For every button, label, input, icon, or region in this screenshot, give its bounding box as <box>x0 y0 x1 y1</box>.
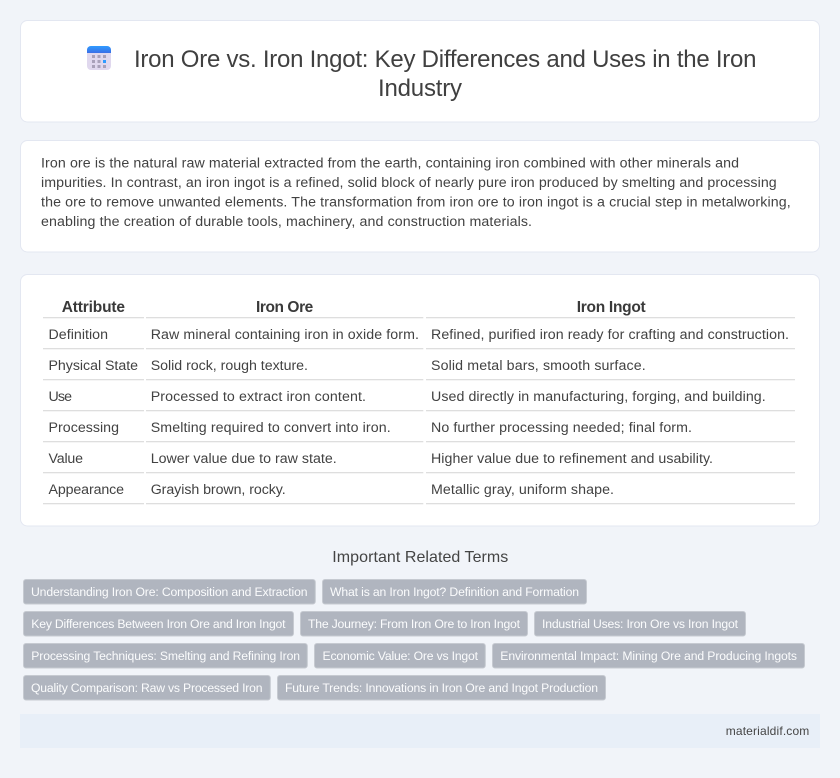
tag: Quality Comparison: Raw vs Processed Iron <box>31 681 262 695</box>
tag <box>322 580 586 604</box>
table row: value: Lower value due to raw state. <box>151 451 337 467</box>
icon: calendar <box>87 46 111 70</box>
tag: What is an Iron Ingot? Definition and Formation <box>330 585 579 599</box>
table row: definition: Definition <box>48 327 108 343</box>
tag <box>24 644 307 668</box>
text block: introduction: Iron ore is the natural raw material extracted from the earth, containing iron combined with other minerals and <box>41 156 739 172</box>
table row: processing: Smelting required to convert into iron. <box>151 420 391 436</box>
tag <box>24 676 270 700</box>
text block: introduction: the ore to remove unwanted elements. The transformation from iron ore to iron ingot is a crucial step in metalworking, <box>41 194 791 210</box>
tag: Economic Value: Ore vs Ingot <box>322 649 479 663</box>
tag list: related terms <box>24 580 804 700</box>
tag <box>300 612 528 636</box>
panel: comparison table <box>20 274 820 526</box>
text block: introduction: impurities. In contrast, an iron ingot is a refined, solid block of nearly pure iron produced by smelting and processing <box>41 175 777 191</box>
tag <box>492 644 804 668</box>
table row: physical state: Solid rock, rough texture. <box>151 358 308 374</box>
panel: header <box>20 20 820 122</box>
table row: use: Processed to extract iron content. <box>151 389 366 405</box>
table row: physical state <box>48 358 646 374</box>
heading: important related terms: Important Related Terms <box>332 549 508 566</box>
table row: definition: Refined, purified iron ready for crafting and construction. <box>431 327 789 343</box>
table row: use: Use <box>48 389 72 405</box>
table row: appearance <box>48 482 614 498</box>
tag: The Journey: From Iron Ore to Iron Ingot <box>308 617 521 631</box>
table row: appearance: Appearance <box>48 482 124 498</box>
tag <box>24 612 294 636</box>
tag <box>278 676 606 700</box>
table row: value <box>48 451 713 467</box>
tag <box>24 580 315 604</box>
table row: appearance: Grayish brown, rocky. <box>151 482 286 498</box>
table header row: Iron Ore <box>256 299 314 316</box>
panel: introduction <box>20 140 820 252</box>
tag <box>314 644 485 668</box>
tag <box>534 612 746 636</box>
tag: Processing Techniques: Smelting and Refining Iron <box>31 649 300 663</box>
tag: Key Differences Between Iron Ore and Iron Ingot <box>31 617 286 631</box>
table row: processing: Processing <box>48 420 119 436</box>
table header row: Iron Ingot <box>577 299 646 316</box>
tag: Environmental Impact: Mining Ore and Producing Ingots <box>500 649 797 663</box>
tag: Future Trends: Innovations in Iron Ore and Ingot Production <box>285 681 598 695</box>
footer <box>20 714 820 748</box>
table row: definition: Raw mineral containing iron in oxide form. <box>151 327 419 343</box>
title: Iron Ore vs. Iron Ingot: Key Differences and Uses in the Iron <box>134 46 756 73</box>
tag: Industrial Uses: Iron Ore vs Iron Ingot <box>542 617 739 631</box>
table row: appearance: Metallic gray, uniform shape. <box>431 482 614 498</box>
tag: Understanding Iron Ore: Composition and Extraction <box>31 585 308 599</box>
table row: physical state: Solid metal bars, smooth surface. <box>431 358 646 374</box>
table row: value: Higher value due to refinement and usability. <box>431 451 713 467</box>
table row: use: Used directly in manufacturing, forging, and building. <box>431 389 766 405</box>
table header row: Attribute <box>62 299 125 316</box>
table row: use <box>48 389 766 405</box>
table row: value: Value <box>48 451 83 467</box>
table row: processing <box>48 420 692 436</box>
text block: introduction: enabling the creation of durable tools, machinery, and construction materials. <box>41 214 532 230</box>
table row: definition <box>48 327 789 343</box>
footer: site name: materialdif.com <box>726 724 809 738</box>
table row: physical state: Physical State <box>48 358 138 374</box>
table header row <box>62 299 646 316</box>
table row: processing: No further processing needed; final form. <box>431 420 692 436</box>
title: Industry <box>378 75 462 102</box>
